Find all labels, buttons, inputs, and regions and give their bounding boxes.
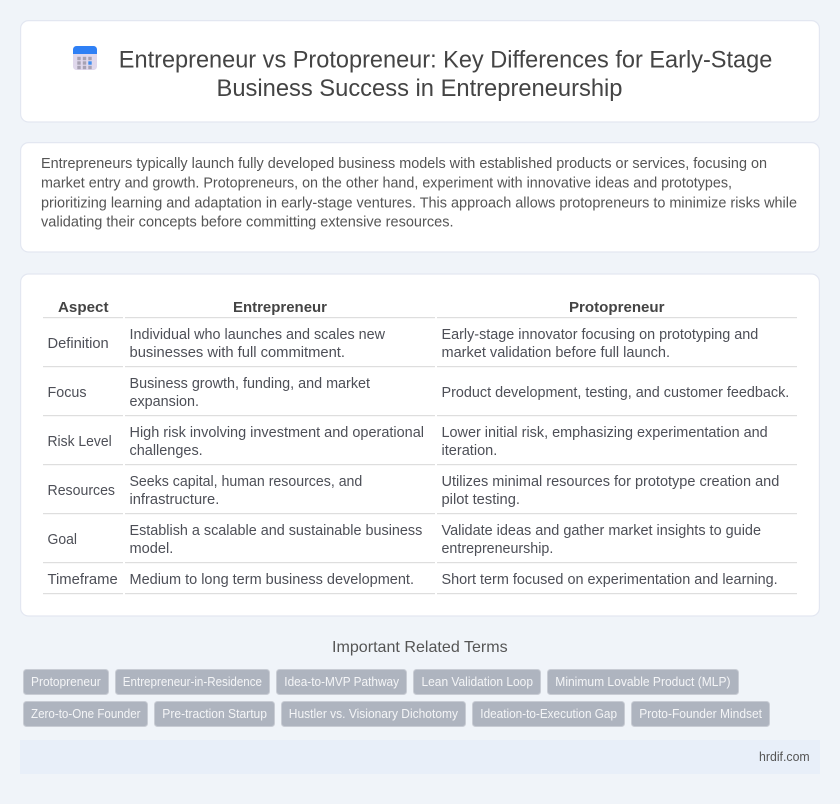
row: definition: businesses with full commitment. bbox=[130, 345, 345, 361]
tag: Lean Validation Loop: Lean Validation Loop bbox=[422, 675, 533, 689]
panel: introduction bbox=[21, 143, 819, 252]
row: definition: Early-stage innovator focusing on prototyping and bbox=[442, 327, 758, 343]
tag: Ideation-to-Execution Gap: Ideation-to-Execution Gap bbox=[480, 707, 617, 721]
footer: hrdif.com bbox=[759, 749, 810, 764]
row: risk level bbox=[43, 425, 797, 465]
title: Business Success in Entrepreneurship bbox=[216, 75, 622, 102]
text block: introduction: Entrepreneurs typically launch fully developed business models with established products or services, focusing on bbox=[41, 156, 767, 172]
row: focus: expansion. bbox=[130, 394, 199, 410]
row: definition: Definition bbox=[48, 336, 109, 352]
tag: Minimum Lovable Product (MLP): Minimum Lovable Product (MLP) bbox=[555, 675, 730, 689]
panel: comparison table bbox=[21, 274, 819, 616]
icon: calendar bbox=[73, 46, 97, 70]
row: resources: pilot testing. bbox=[442, 492, 520, 508]
row: goal: entrepreneurship. bbox=[442, 541, 553, 557]
row: resources: Utilizes minimal resources for prototype creation and bbox=[442, 474, 779, 490]
row: focus: Product development, testing, and customer feedback. bbox=[442, 385, 789, 401]
text block: introduction bbox=[41, 156, 797, 230]
row: definition bbox=[43, 327, 797, 367]
tag: Protopreneur: Protopreneur bbox=[31, 675, 101, 689]
row: risk level: Lower initial risk, emphasizing experimentation and bbox=[442, 425, 768, 441]
title: Entrepreneur vs Protopreneur: Key Differences for Early-Stage bbox=[119, 46, 772, 74]
row: definition: market validation before full launch. bbox=[442, 345, 670, 361]
tag: Entrepreneur-in-Residence bbox=[116, 670, 270, 694]
row: resources: Resources bbox=[48, 483, 115, 499]
row: risk level: Risk Level bbox=[48, 434, 112, 450]
row: goal: Establish a scalable and sustainable business bbox=[130, 523, 422, 539]
row: timeframe bbox=[43, 572, 797, 594]
row: resources: Seeks capital, human resources, and bbox=[130, 474, 362, 490]
row: focus: Focus bbox=[48, 385, 86, 401]
tag: Proto-Founder Mindset: Proto-Founder Mindset bbox=[639, 707, 763, 721]
tag: Idea-to-MVP Pathway bbox=[276, 670, 406, 694]
tag: Pre-traction Startup: Pre-traction Startup bbox=[162, 707, 267, 721]
tag: Hustler vs. Visionary Dichotomy: Hustler vs. Visionary Dichotomy bbox=[289, 707, 459, 721]
row: resources: infrastructure. bbox=[130, 492, 219, 508]
tag: Minimum Lovable Product (MLP) bbox=[548, 670, 738, 694]
row: resources bbox=[43, 474, 797, 514]
tag: Protopreneur bbox=[24, 670, 108, 694]
row: timeframe: Medium to long term business development. bbox=[130, 572, 414, 588]
row: risk level: High risk involving investment and operational bbox=[130, 425, 424, 441]
tag: Zero-to-One Founder bbox=[24, 702, 148, 726]
heading: related terms: Important Related Terms bbox=[332, 639, 508, 656]
tag: Entrepreneur-in-Residence: Entrepreneur-in-Residence bbox=[123, 675, 262, 689]
tag: Hustler vs. Visionary Dichotomy bbox=[282, 702, 466, 726]
row: focus bbox=[43, 376, 797, 416]
tag: Lean Validation Loop bbox=[414, 670, 540, 694]
tag: Idea-to-MVP Pathway: Idea-to-MVP Pathway bbox=[284, 675, 400, 689]
tag: Proto-Founder Mindset bbox=[632, 702, 770, 726]
table header: Entrepreneur bbox=[233, 299, 327, 316]
row: goal: model. bbox=[130, 541, 173, 557]
row: goal: Validate ideas and gather market insights to guide bbox=[442, 523, 761, 539]
title bbox=[119, 46, 772, 102]
table header: Aspect bbox=[58, 299, 108, 316]
text block: introduction: market entry and growth. Protopreneurs, on the other hand, experiment with innovative ideas and prototypes, bbox=[41, 176, 732, 192]
row: goal bbox=[43, 523, 797, 563]
row: risk level: challenges. bbox=[130, 443, 203, 459]
row: timeframe: Short term focused on experimentation and learning. bbox=[442, 572, 778, 588]
row: timeframe: Timeframe bbox=[48, 572, 118, 588]
tag: Pre-traction Startup bbox=[154, 702, 274, 726]
text block: introduction: prioritizing learning and adaptation in early-stage ventures. This approach allows protopreneurs to minimize risks while bbox=[41, 196, 797, 212]
text block: introduction: validating their concepts before committing extensive resources. bbox=[41, 214, 454, 230]
row: focus: Business growth, funding, and market bbox=[130, 376, 370, 392]
tag: Zero-to-One Founder: Zero-to-One Founder bbox=[31, 707, 140, 721]
tag list: related terms bbox=[24, 670, 770, 726]
row: goal: Goal bbox=[48, 532, 77, 548]
tag: Ideation-to-Execution Gap bbox=[472, 702, 624, 726]
table header: Protopreneur bbox=[569, 299, 665, 316]
panel: header bbox=[21, 21, 819, 122]
footer bbox=[20, 740, 820, 774]
table header bbox=[43, 299, 797, 318]
row: definition: Individual who launches and scales new bbox=[130, 327, 386, 343]
row: risk level: iteration. bbox=[442, 443, 497, 459]
